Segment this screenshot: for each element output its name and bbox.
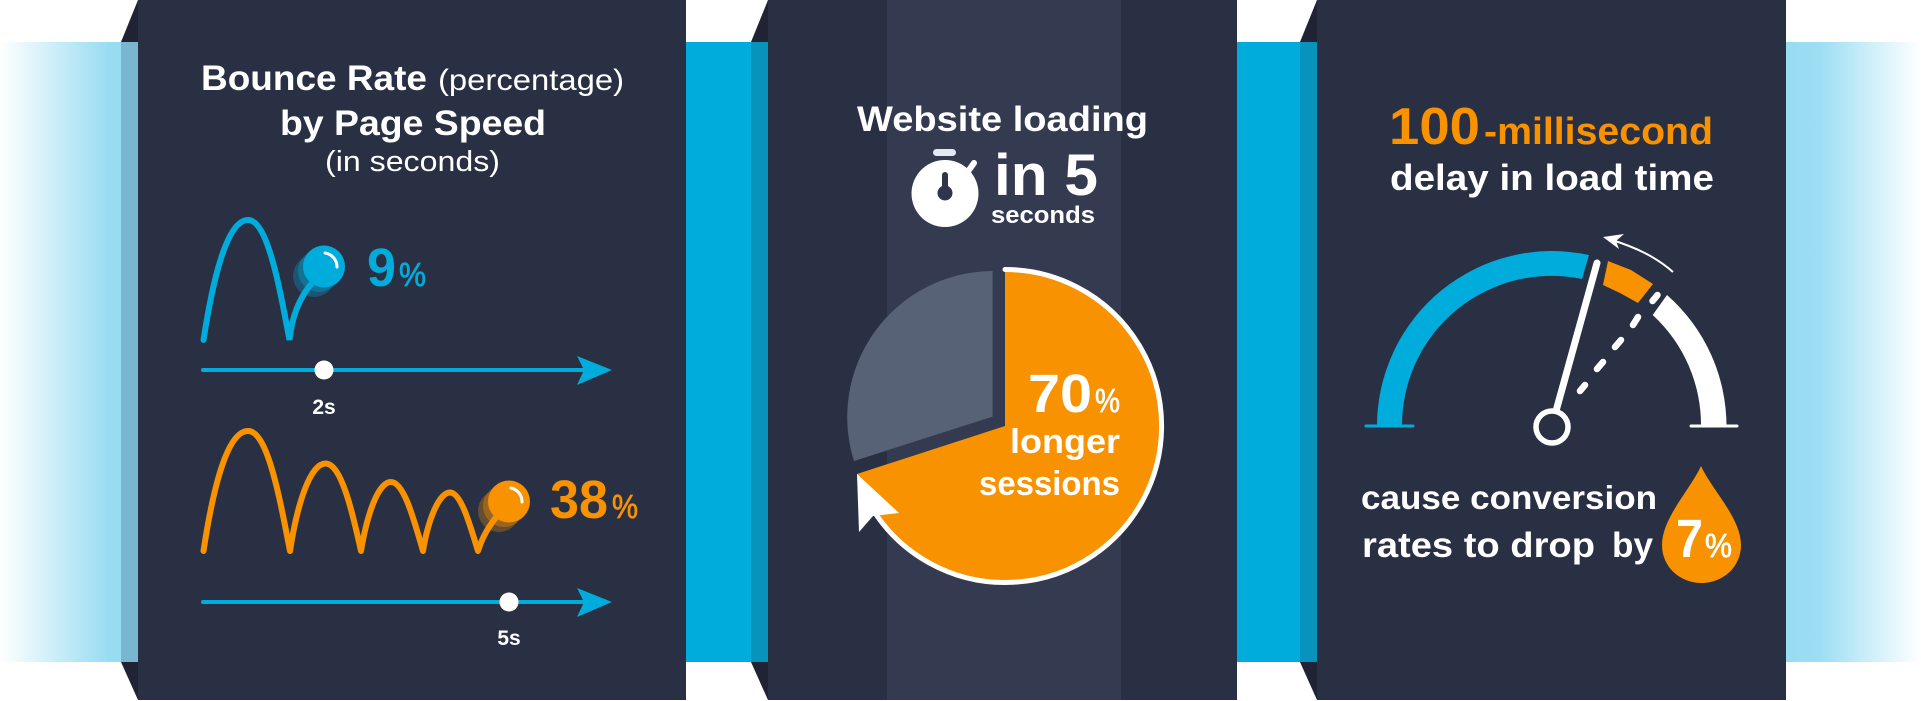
text: cause conversion rates: cause conversion: [1361, 479, 1657, 516]
chart: 5s bounce: [204, 431, 638, 551]
heading: bounce rate: Bounce Rate: [201, 59, 427, 98]
pie outline arc: [875, 269, 1162, 582]
pie slice: 70 percent: [857, 271, 1159, 581]
gauge: orange segment: [1603, 261, 1653, 303]
pie slice: remainder: [847, 271, 993, 461]
pie label: [979, 364, 1120, 503]
arrow: 5s timeline: [203, 588, 612, 650]
heading: bounce rate: (in seconds): [325, 146, 500, 178]
icon: drop with 7 percent: [1662, 466, 1741, 583]
heading: 100-millisecond delay: delay in load time: [1390, 157, 1714, 198]
gauge: [1366, 234, 1737, 443]
chart: 2s bounce: %: [399, 256, 426, 293]
pie label: 70: [1028, 364, 1092, 424]
gauge: hub: [1536, 411, 1568, 443]
arrow: needle movement: [1603, 234, 1673, 272]
gauge: blue arc: [1377, 251, 1589, 427]
heading: bounce rate: [201, 59, 624, 178]
text: in 5 seconds: seconds: [991, 202, 1095, 229]
text: cause conversion rates: rates to drop: [1362, 526, 1595, 565]
panel: load time delay: [1317, 0, 1786, 700]
arrow: 2s timeline: 2s: [312, 396, 336, 419]
heading: bounce rate: by Page Speed: [280, 104, 546, 143]
gauge: dashed previous needle: [1580, 295, 1658, 391]
gauge: white arc: [1653, 295, 1727, 427]
chart: 2s bounce: [204, 220, 426, 340]
arrow: 5s timeline: 5s: [497, 627, 521, 650]
chart: 5s bounce: %: [612, 488, 638, 525]
heading: 100-millisecond delay: 100: [1389, 98, 1480, 156]
gauge: needle: [1556, 263, 1597, 411]
icon: cursor arrow: [857, 474, 899, 532]
pie label: %: [1095, 382, 1120, 419]
chart: 5s bounce: 38: [550, 470, 608, 530]
panel: website loading: [768, 0, 1237, 700]
panel: bounce rate: [138, 0, 686, 700]
text: cause conversion rates: [1361, 479, 1657, 565]
text: cause conversion rates: by: [1612, 526, 1654, 565]
heading: bounce rate: (percentage): [438, 64, 624, 97]
icon: drop with 7 percent: %: [1705, 527, 1732, 564]
pie label: longer: [1010, 423, 1120, 461]
pie label: sessions: [979, 465, 1120, 503]
icon: stopwatch: [912, 149, 978, 227]
heading: 100-millisecond delay: [1389, 98, 1714, 198]
text: in 5 seconds: in 5: [994, 143, 1098, 208]
pie chart: [847, 269, 1162, 582]
chart: 2s bounce: 9: [367, 238, 396, 298]
icon: drop with 7 percent: 7: [1676, 509, 1703, 569]
heading: 100-millisecond delay: -millisecond: [1484, 111, 1713, 153]
panel folds: [121, 0, 1317, 700]
arrow: 2s timeline: [203, 356, 612, 419]
heading: website loading: Website loading: [857, 100, 1148, 139]
